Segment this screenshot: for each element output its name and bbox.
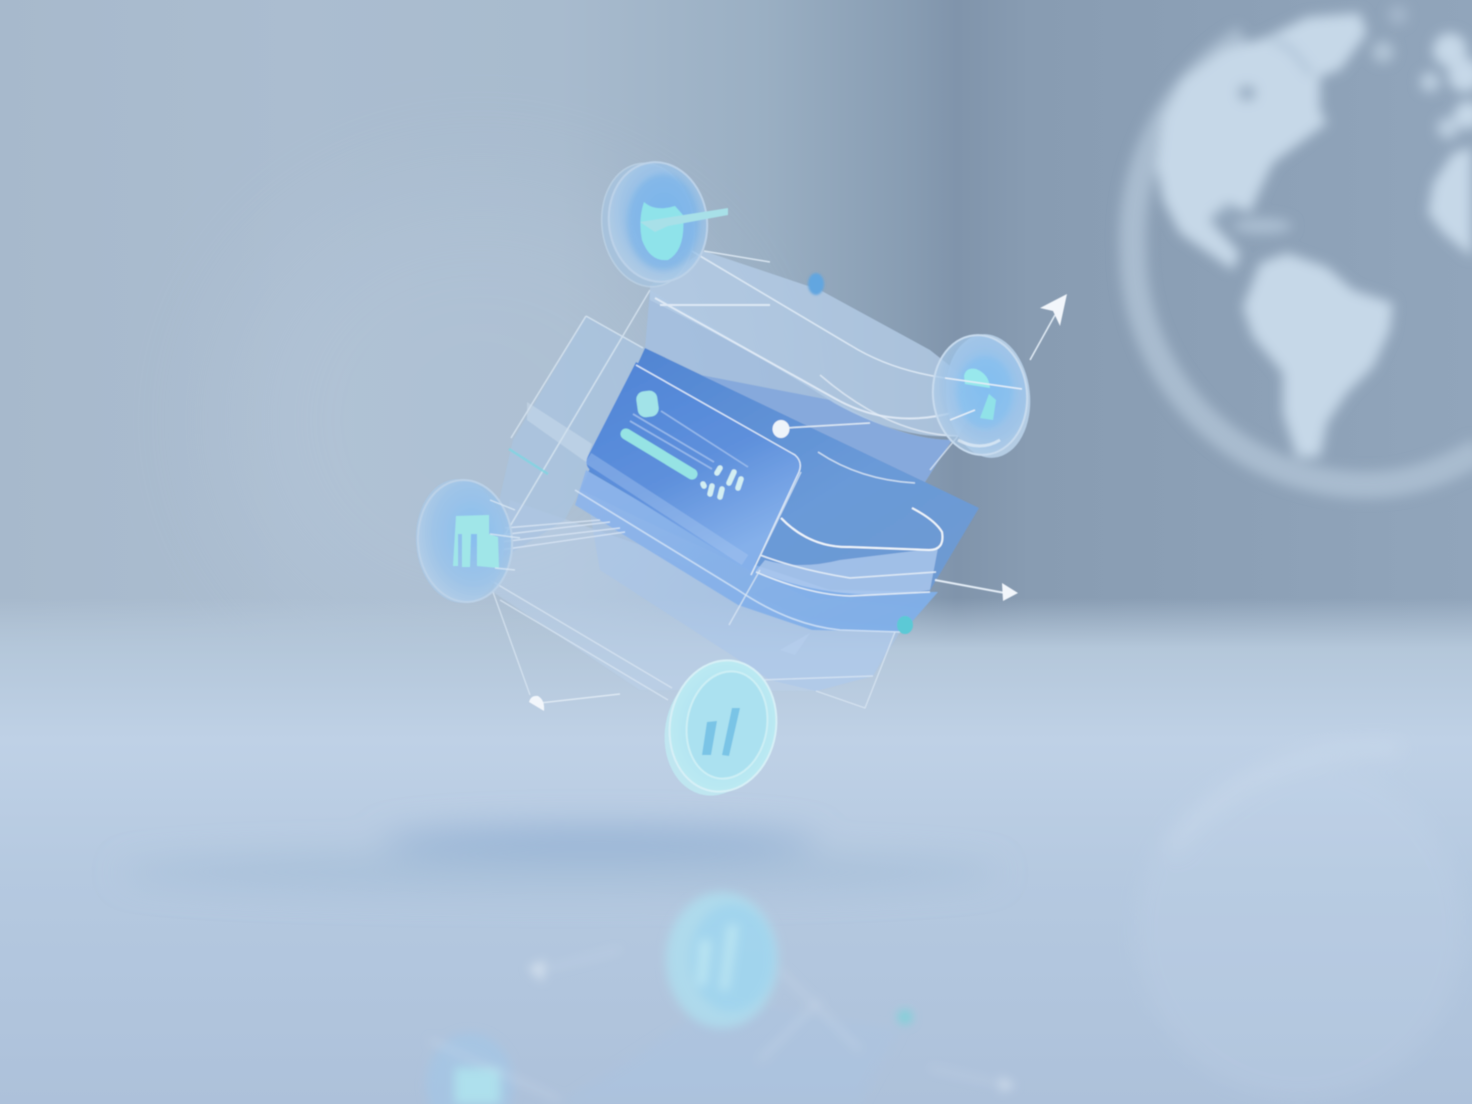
card avatar <box>635 390 660 418</box>
rear glass side panel <box>490 290 650 560</box>
top glass wave band <box>650 250 981 436</box>
card text lines <box>630 411 748 469</box>
reflected bottom coin <box>666 892 778 1028</box>
central blue dashboard card <box>586 362 800 575</box>
reflected left coin <box>426 1033 514 1104</box>
floor shadow <box>120 826 1000 892</box>
middle glass wave band <box>729 436 958 625</box>
white node with line <box>772 420 870 438</box>
arrow: right <box>935 580 1018 601</box>
teal node <box>897 616 913 634</box>
blue top node <box>808 273 824 295</box>
continent: africa and europe <box>1372 5 1472 257</box>
continent: south america <box>1243 253 1393 457</box>
floor reflection: module <box>426 892 1016 1104</box>
arrow: up right <box>1030 294 1067 360</box>
background globe <box>1133 5 1472 485</box>
reflected arrows and dots <box>528 960 545 982</box>
coin: bottom, signal icon <box>655 652 787 804</box>
card progress bar <box>626 434 692 474</box>
connector strands from left coin <box>500 520 625 550</box>
lower blue band <box>575 470 938 632</box>
left pointer node <box>529 694 620 711</box>
card mini bars <box>703 468 741 497</box>
blue back panel <box>580 348 979 600</box>
upper glass body behind the card <box>645 290 952 482</box>
continent: north america <box>1157 13 1367 270</box>
reflected panels <box>560 1000 900 1104</box>
globe ring <box>1133 38 1472 485</box>
coin: right, shield icon <box>927 330 1036 462</box>
floating glass module <box>412 156 1067 804</box>
coin: top left, check icon <box>594 156 728 293</box>
floor <box>0 598 1472 1104</box>
floor reflection: globe <box>1135 749 1465 1100</box>
coin: left, bar chart icon <box>412 476 520 606</box>
rear lower glass panel <box>490 490 900 708</box>
